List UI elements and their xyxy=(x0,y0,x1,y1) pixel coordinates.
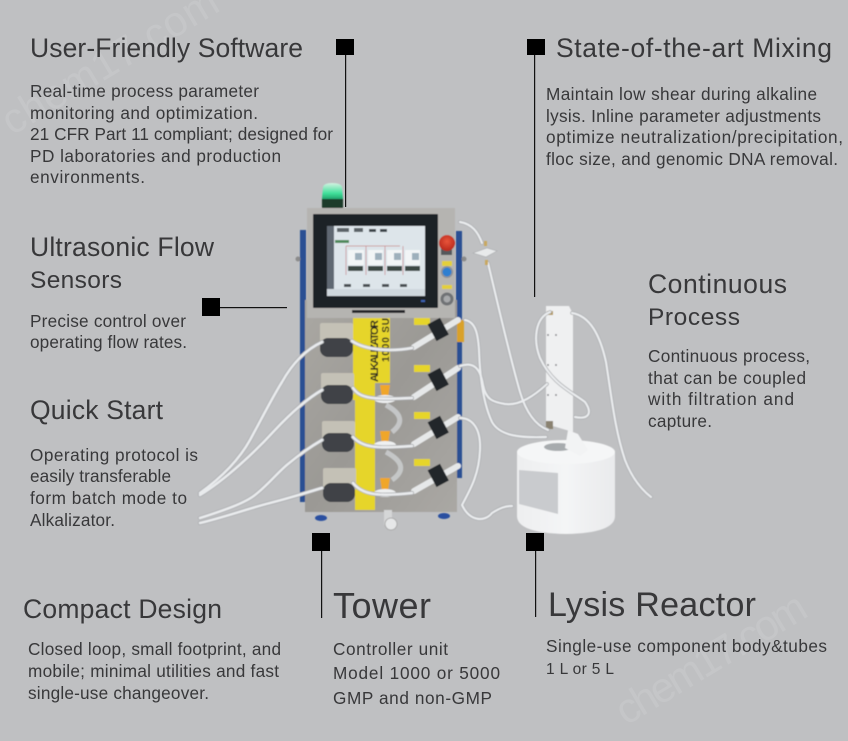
text block: 1 L or 5 L xyxy=(546,661,614,678)
panel: ultrasonic flow sensors xyxy=(30,232,215,352)
text block xyxy=(546,84,843,169)
text block: Real-time process parameter xyxy=(30,81,259,101)
text block: Continuous process, xyxy=(648,346,810,366)
green status light xyxy=(322,183,343,208)
callout marker: software xyxy=(336,39,354,207)
text block: Alkalizator. xyxy=(30,510,115,530)
text block: optimize neutralization/precipitation, xyxy=(546,127,843,147)
panel: continuous process xyxy=(647,269,810,431)
heading: Tower xyxy=(333,585,431,626)
tower feet xyxy=(315,513,450,521)
text block: PD laboratories and production xyxy=(30,146,281,166)
text block: Operating protocol is xyxy=(30,445,198,465)
text block: Closed loop, small footprint, and xyxy=(28,639,281,659)
peristaltic pumps xyxy=(320,323,356,502)
heading: Process xyxy=(648,304,740,331)
watermarks: chem17.com xyxy=(606,583,815,734)
heading: User-Friendly Software xyxy=(30,33,303,63)
inline filter xyxy=(473,241,497,265)
flow sensors xyxy=(414,318,458,491)
text block xyxy=(333,639,500,708)
text block: form batch mode to xyxy=(30,488,187,508)
panel: compact design xyxy=(23,594,281,703)
text block: with filtration and xyxy=(647,389,794,409)
product illustration: tower and lysis reactor xyxy=(200,183,651,534)
text block: Single-use component body&tubes xyxy=(546,636,827,656)
heading: State-of-the-art Mixing xyxy=(556,33,832,63)
heading: Continuous xyxy=(648,269,787,299)
yellow labels: 1000 SU xyxy=(381,318,392,362)
text block: Maintain low shear during alkaline xyxy=(546,84,817,104)
text block xyxy=(30,311,187,352)
panel: tower xyxy=(333,585,500,708)
text block: 21 CFR Part 11 compliant; designed for xyxy=(30,124,333,144)
reactor tubing xyxy=(460,222,651,519)
callout marker: lysis reactor xyxy=(526,533,544,617)
heading xyxy=(648,269,787,331)
callout marker: mixing xyxy=(527,39,545,297)
text block xyxy=(30,81,333,187)
heading: Lysis Reactor xyxy=(548,586,756,624)
yellow labels: ALKALIZATOR xyxy=(369,320,381,382)
panel: lysis reactor xyxy=(546,586,827,678)
text block: single-use changeover. xyxy=(28,683,209,703)
heading: Sensors xyxy=(30,267,122,294)
touchscreen xyxy=(313,214,438,313)
text block: GMP and non-GMP xyxy=(333,688,492,708)
mixer column xyxy=(546,306,588,456)
text block xyxy=(28,639,281,703)
text block: lysis. Inline parameter adjustments xyxy=(546,106,821,126)
tower blue side rails xyxy=(300,230,462,502)
control buttons xyxy=(439,235,455,306)
text block xyxy=(647,346,810,431)
mixing connectors and cups xyxy=(374,385,401,530)
panel: user-friendly software xyxy=(30,33,333,187)
heading: Quick Start xyxy=(30,395,164,425)
heading xyxy=(30,232,215,294)
yellow labels xyxy=(353,318,464,510)
callout marker: flow sensors xyxy=(202,298,287,316)
panel: quick start xyxy=(30,395,198,530)
text block: monitoring and optimization. xyxy=(30,103,258,123)
heading: Ultrasonic Flow xyxy=(30,232,215,262)
text block: floc size, and genomic DNA removal. xyxy=(546,149,838,169)
callout marker: tower xyxy=(312,533,330,618)
tower steel body xyxy=(296,208,466,512)
lysis reactor vessel xyxy=(517,440,615,534)
text block: capture. xyxy=(648,411,712,431)
text block xyxy=(30,445,198,530)
text block: Controller unit xyxy=(333,639,448,659)
panel: state-of-the-art mixing xyxy=(546,33,843,169)
text block xyxy=(546,636,827,678)
text block: mobile; minimal utilities and fast xyxy=(28,661,279,681)
text block: Precise control over xyxy=(30,311,186,331)
text block: that can be coupled xyxy=(648,368,806,388)
inlet tubing xyxy=(200,341,412,523)
text block: easily transferable xyxy=(30,466,171,486)
heading: Compact Design xyxy=(23,594,222,624)
text block: Model 1000 or 5000 xyxy=(333,663,500,683)
text block: environments. xyxy=(30,167,145,187)
text block: operating flow rates. xyxy=(30,332,187,352)
